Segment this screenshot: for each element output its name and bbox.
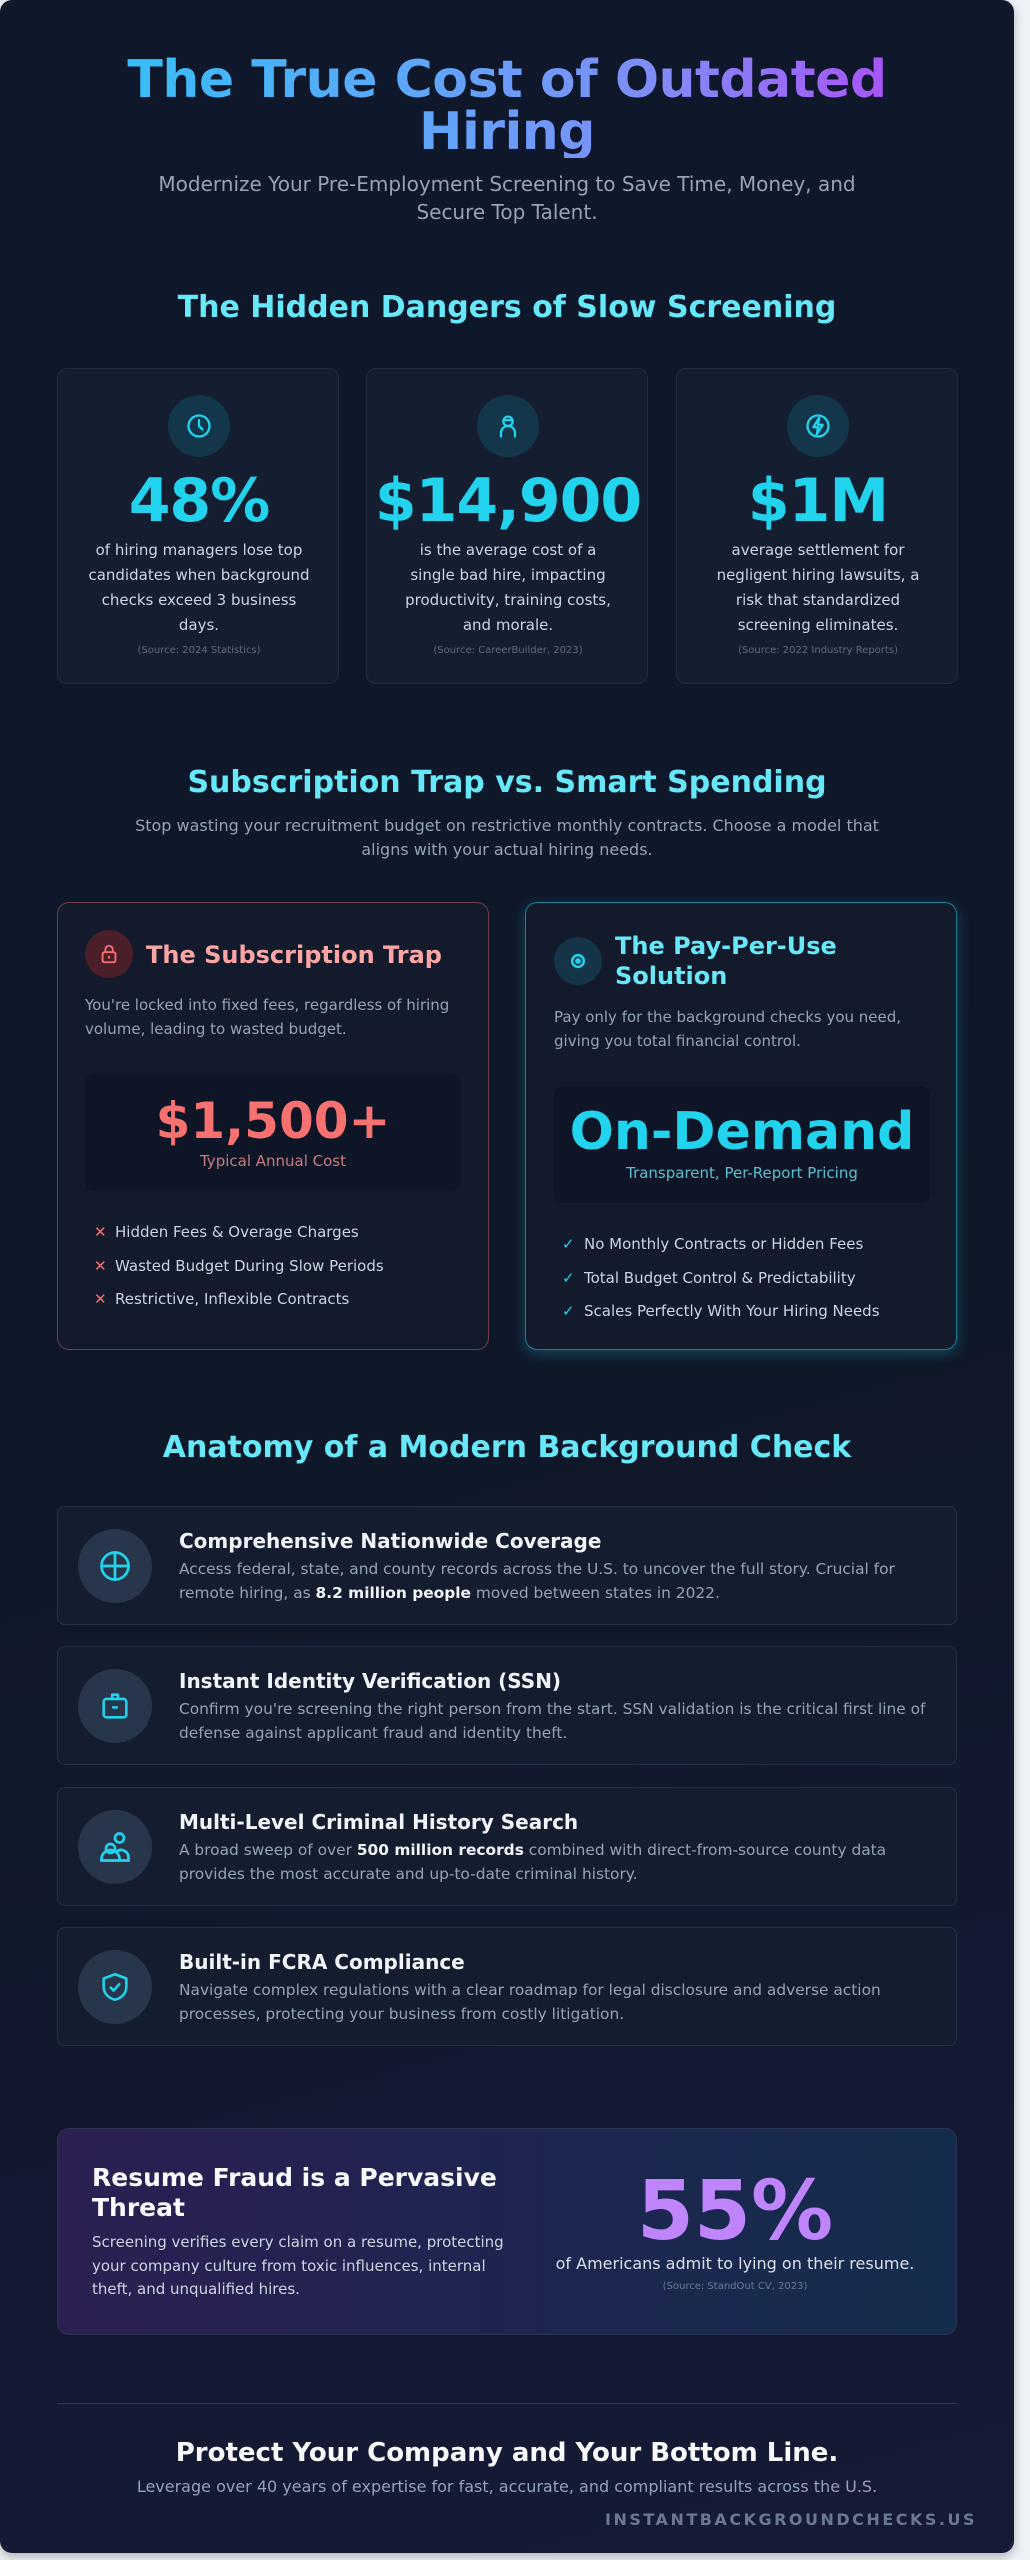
- list: drawbacks: Wasted Budget During Slow Periods: [115, 1256, 384, 1274]
- list: benefits: ✓: [562, 1268, 575, 1286]
- stat description: is the average cost of a single bad hire, impacting productivity, training costs, and morale.: [405, 541, 611, 634]
- icon: target: [554, 937, 602, 985]
- stat card: $14,900: [366, 368, 648, 684]
- stat number: $1M: [748, 466, 888, 536]
- icon: lightning: [787, 395, 849, 457]
- list: benefits: No Monthly Contracts or Hidden Fees: [584, 1235, 863, 1253]
- list: drawbacks: Restrictive, Inflexible Contracts: [115, 1290, 349, 1308]
- list: benefits: ✓: [562, 1302, 575, 1320]
- feature: criminal history: A broad sweep of over 500 million records combined with direct-from-source county data provides the most accurate and up-to-date criminal history.: [179, 1841, 886, 1882]
- callout text: Screening verifies every claim on a resume, protecting your company culture from toxic influences, internal theft, and unqualified hires.: [92, 2233, 504, 2298]
- list: drawbacks: ✕: [94, 1223, 107, 1241]
- panel: subscription trap: [57, 902, 489, 1350]
- source: (Source: CareerBuilder, 2023): [433, 645, 583, 656]
- panel description: Pay only for the background checks you need, giving you total financial control.: [554, 1008, 901, 1050]
- panel title: The Subscription Trap: [146, 941, 442, 969]
- icon: shield: [78, 1950, 152, 2024]
- feature: FCRA compliance: Built-in FCRA Compliance: [179, 1950, 465, 1974]
- feature: identity verification: Confirm you're screening the right person from the start. SSN validation is the critical first line of defense against applicant fraud and identity theft.: [179, 1700, 925, 1742]
- stat number: $14,900: [375, 466, 641, 536]
- panel title: The Pay-Per-Use Solution: [615, 932, 837, 990]
- list: benefits: Scales Perfectly With Your Hiring Needs: [584, 1302, 880, 1320]
- heading: subscription trap vs smart spending: Subscription Trap vs. Smart Spending: [187, 765, 827, 800]
- source: (Source: 2022 Industry Reports): [738, 645, 898, 656]
- cost value: $1,500+: [156, 1092, 390, 1150]
- heading: hidden dangers: The Hidden Dangers of Slow Screening: [178, 290, 836, 325]
- footer heading: Protect Your Company and Your Bottom Line.: [176, 2438, 838, 2468]
- source: (Source: 2024 Statistics): [137, 645, 261, 656]
- cost label: Typical Annual Cost: [200, 1152, 346, 1170]
- section subtitle: Stop wasting your recruitment budget on restrictive monthly contracts. Choose a model that aligns with your actual hiring needs.: [135, 816, 879, 858]
- pricing value: On-Demand: [570, 1102, 914, 1162]
- cost box: [85, 1074, 461, 1191]
- callout stat: 55%: [637, 2164, 833, 2259]
- list: drawbacks: ✕: [94, 1290, 107, 1308]
- icon: users: [78, 1810, 152, 1884]
- feature: nationwide coverage: [57, 1506, 957, 1625]
- list: benefits: Total Budget Control & Predictability: [584, 1268, 856, 1286]
- list: drawbacks: ✕: [94, 1256, 107, 1274]
- icon: globe: [78, 1529, 152, 1603]
- stat description: of hiring managers lose top candidates when background checks exceed 3 business days.: [88, 541, 310, 634]
- icon: id badge: [78, 1669, 152, 1743]
- subtitle: Modernize Your Pre-Employment Screening to Save Time, Money, and Secure Top Talent.: [158, 172, 856, 224]
- pricing label: Transparent, Per-Report Pricing: [626, 1164, 858, 1182]
- icon: lock: [85, 930, 133, 978]
- stat description: average settlement for negligent hiring lawsuits, a risk that standardized screening eliminates.: [717, 541, 919, 634]
- list: drawbacks: Hidden Fees & Overage Charges: [115, 1223, 359, 1241]
- stat number: 48%: [129, 466, 269, 536]
- feature: criminal history: [57, 1787, 957, 1906]
- feature: identity verification: [57, 1646, 957, 1765]
- heading: anatomy: Anatomy of a Modern Background Check: [163, 1430, 851, 1465]
- pricing box: [554, 1086, 930, 1203]
- list: drawbacks: [94, 1223, 384, 1308]
- callout source: (Source: StandOut CV, 2023): [663, 2281, 807, 2292]
- feature: FCRA compliance: Navigate complex regulations with a clear roadmap for legal disclosure and adverse action processes, protecting your business from costly litigation.: [179, 1981, 881, 2022]
- footer text: Leverage over 40 years of expertise for fast, accurate, and compliant results across the U.S.: [137, 2477, 877, 2496]
- title: The True Cost of Outdated Hiring: [127, 50, 887, 162]
- list: benefits: [562, 1235, 880, 1320]
- feature: FCRA compliance: [57, 1927, 957, 2046]
- callout title: Resume Fraud is a Pervasive Threat: [92, 2163, 497, 2222]
- list: benefits: ✓: [562, 1235, 575, 1253]
- callout: resume fraud: [57, 2128, 957, 2335]
- callout stat label: of Americans admit to lying on their resume.: [556, 2254, 914, 2273]
- feature: nationwide coverage: Comprehensive Nationwide Coverage: [179, 1529, 601, 1553]
- feature: identity verification: Instant Identity Verification (SSN): [179, 1669, 561, 1693]
- panel: pay-per-use solution: [525, 902, 957, 1350]
- feature: nationwide coverage: Access federal, state, and county records across the U.S. to uncover the full story. Crucial for remote hiring, as 8.2 million people moved between states in 2022.: [179, 1560, 895, 1602]
- panel description: You're locked into fixed fees, regardless of hiring volume, leading to wasted budget.: [85, 996, 449, 1038]
- stat card: $1M: [676, 368, 958, 684]
- footer url: INSTANTBACKGROUNDCHECKS.US: [605, 2510, 977, 2529]
- feature: criminal history: Multi-Level Criminal History Search: [179, 1810, 578, 1834]
- stat card: 48%: [57, 368, 339, 684]
- icon: person: [477, 395, 539, 457]
- icon: clock: [168, 395, 230, 457]
